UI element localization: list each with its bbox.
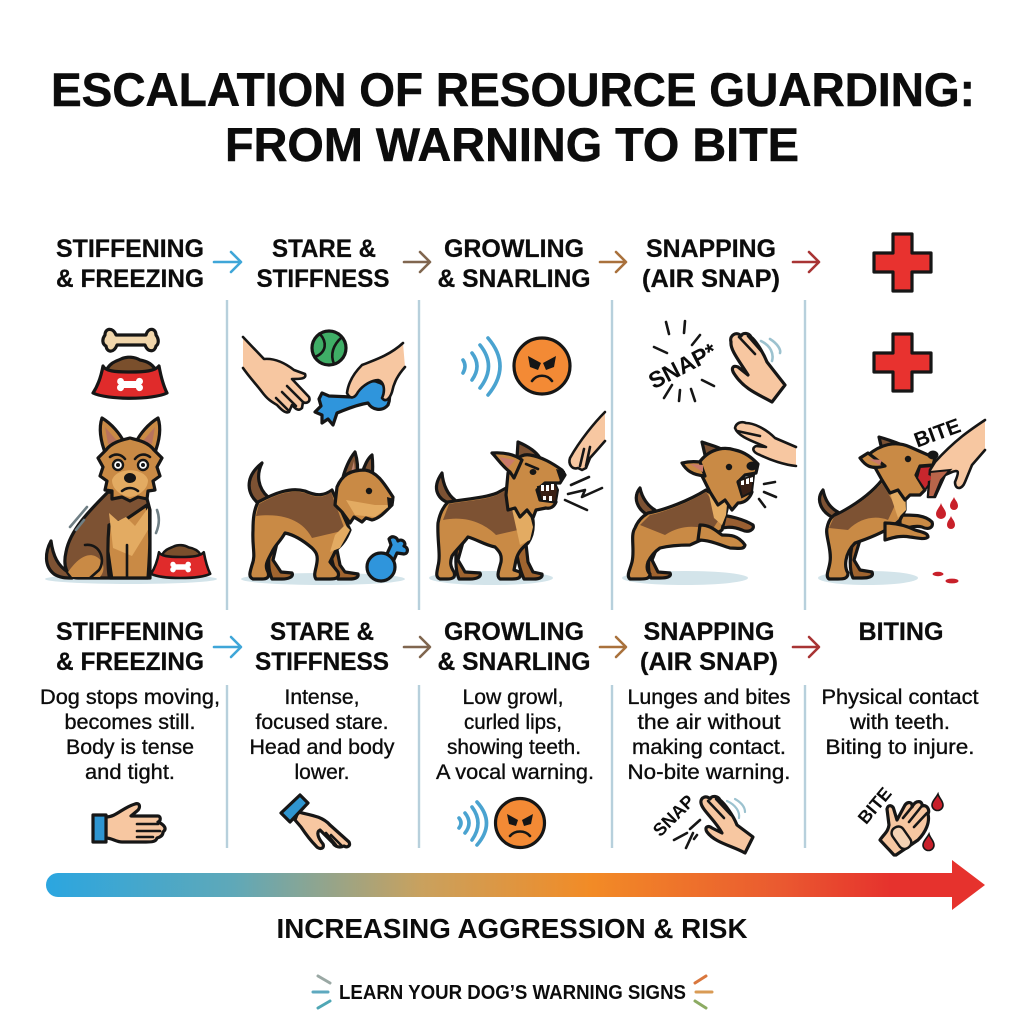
text: stage 2 description: lower. — [294, 761, 350, 784]
top stage headings — [56, 235, 780, 293]
dog: biting hand — [818, 437, 938, 585]
title: FROM WARNING TO BITE — [225, 118, 799, 171]
lower stage headings: & FREEZING — [56, 648, 204, 676]
label: BITE: BITE — [911, 414, 964, 452]
text: stage 1 description: and tight. — [85, 761, 175, 784]
text: stage 4 description: Lunges and bites — [628, 686, 790, 709]
text: stage 2 description: focused stare. — [256, 711, 388, 734]
text: stage 1 description: Body is tense — [66, 736, 194, 759]
panel: stage 5 illustration — [818, 334, 985, 585]
panel: stage 3 illustration — [429, 338, 605, 585]
icon: SNAP and hand — [649, 791, 753, 853]
icon: open hand — [243, 337, 309, 412]
text: stage 1 description: becomes still. — [64, 711, 196, 734]
footer: learn your dog's warning signs: LEARN YOUR DOG’S WARNING SIGNS — [339, 982, 686, 1004]
text: stage 3 description: curled lips, — [464, 711, 562, 734]
text: stage 5 description: with teeth. — [849, 711, 950, 734]
dog: lunging air snap — [622, 442, 776, 585]
text: stage 1 description: Dog stops moving, — [40, 686, 220, 709]
text: stage 5 description: Physical contact — [822, 686, 979, 709]
icon: SNAP and hand: SNAP — [649, 791, 698, 840]
lower stage headings: (AIR SNAP) — [640, 648, 778, 676]
icon: BITE and injured hand — [854, 784, 943, 855]
lower stage headings: & SNARLING — [438, 648, 590, 676]
icon: angry face — [514, 338, 570, 394]
top stage headings: STIFFENING — [56, 235, 204, 263]
top stage headings: STIFFNESS — [256, 265, 390, 293]
lower stage headings — [56, 618, 944, 676]
text: stage 2 description: Head and body — [250, 736, 395, 759]
icon: food bowl — [93, 357, 167, 398]
text: stage 3 description: showing teeth. — [447, 736, 581, 759]
text: stage 1 description — [40, 686, 220, 784]
top stage headings: SNAPPING — [646, 235, 776, 263]
title — [51, 63, 975, 171]
lower stage headings: GROWLING — [444, 618, 584, 646]
icon: SNAP burst: SNAP* — [644, 338, 721, 394]
text: stage 3 description: Low growl, — [462, 686, 564, 709]
icon: reaching hand and growl lines — [565, 412, 605, 510]
text: stage 4 description: the air without — [638, 711, 781, 734]
panel: stage 2 illustration — [241, 331, 407, 585]
dog: growling — [429, 442, 565, 585]
icon: hand gripping blue toy — [315, 343, 405, 425]
dog: sitting and frozen — [45, 418, 217, 584]
top arrows between stages — [214, 252, 819, 272]
text: stage 4 description: No-bite warning. — [628, 761, 790, 784]
text: stage 5 description: Biting to injure. — [826, 736, 974, 759]
gradient risk arrow — [46, 860, 985, 910]
text: stage 4 description: making contact. — [632, 736, 786, 759]
title: ESCALATION OF RESOURCE GUARDING: — [51, 63, 975, 116]
lower arrows between stages — [214, 637, 819, 657]
icon: BITE and injured hand: BITE — [854, 784, 896, 828]
footer: learn your dog's warning signs — [313, 976, 712, 1008]
top stage headings: GROWLING — [444, 235, 584, 263]
lower stage headings: STARE & — [270, 618, 374, 646]
panel: stage 4 illustration — [622, 321, 796, 585]
text: stage 2 description — [250, 686, 395, 784]
text: stage 4 description — [628, 686, 790, 784]
text: stage 2 description: Intense, — [284, 686, 360, 709]
lower stage headings: BITING — [858, 618, 944, 646]
dog: stiff standing — [241, 452, 407, 585]
text: stage 3 description — [436, 686, 594, 784]
icon: raised hand — [731, 333, 785, 402]
top stage headings: & SNARLING — [438, 265, 590, 293]
top stage headings: (AIR SNAP) — [642, 265, 780, 293]
icon: bone — [103, 329, 158, 351]
lower stage headings: STIFFENING — [56, 618, 204, 646]
icon: sound waves — [463, 338, 500, 395]
icon: blue ball toy — [367, 537, 407, 581]
icon: blood drops — [932, 497, 958, 583]
lower stage headings: SNAPPING — [644, 618, 774, 646]
icon: bitten hand — [925, 420, 985, 497]
top stage headings: & FREEZING — [56, 265, 204, 293]
lower stage headings: STIFFNESS — [255, 648, 389, 676]
icon: red cross top heading — [874, 234, 931, 291]
icon: sound waves and angry face — [459, 798, 544, 848]
panel: stage 1 illustration — [45, 329, 217, 584]
text: stage 5 description — [822, 686, 979, 759]
icon: red cross — [874, 334, 931, 391]
icon: green ball — [312, 331, 346, 365]
text: stage 3 description: A vocal warning. — [436, 761, 594, 784]
icon: lowered hand with blue cuff — [281, 795, 350, 848]
caption: increasing aggression and risk: INCREASING AGGRESSION & RISK — [276, 913, 748, 944]
top stage headings: STARE & — [272, 235, 376, 263]
icon: open hand with blue cuff — [93, 804, 165, 842]
icon: pulling-back hand — [735, 422, 796, 466]
